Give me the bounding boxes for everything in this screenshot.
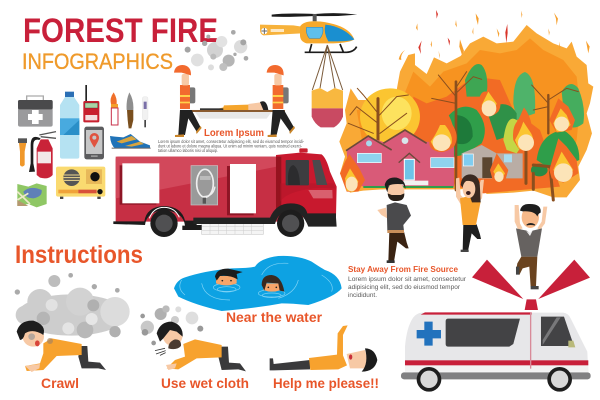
walkie talkie: [83, 85, 99, 122]
caption: Near the water: Near the water: [226, 310, 323, 325]
lying man asking for help: [270, 325, 377, 372]
medics carrying stretcher: [174, 65, 295, 137]
right storage panel: [227, 164, 256, 215]
wheels: [150, 210, 304, 237]
swimmer one: [215, 269, 243, 285]
Stay Away paragraph: Lorem ipsum dolor sit amet, consectetur: [348, 276, 467, 283]
left medic: [174, 65, 202, 137]
ambulance cab window: [541, 317, 574, 346]
water pool: [174, 256, 342, 311]
swimmer two: [262, 275, 284, 292]
Stay Away heading: Stay Away From Fire Source: [348, 264, 458, 274]
Stay Away paragraph: adipisicing elit, sed do eiusmod tempor: [348, 284, 461, 291]
crawling man: [17, 321, 106, 372]
right medic: [267, 65, 295, 137]
map: [17, 183, 47, 207]
Stay Away paragraph: [348, 276, 467, 299]
radio: [56, 167, 105, 199]
caption: Help me please: Help me please!!: [273, 376, 379, 391]
fire truck: [113, 148, 337, 237]
caption: Crawl: Crawl: [41, 376, 79, 391]
grey house: [462, 145, 523, 178]
fire truck text paragraph: dunt ut labore et dolore magna aliqua. Ut enim ad minim veniam, quis nostrud exerci-: [158, 144, 302, 149]
fire truck text heading: Lorem Ipsum: [204, 127, 264, 139]
title: FOREST FIRE: [23, 12, 218, 50]
Stay Away paragraph: incididunt.: [348, 292, 377, 299]
bare trees: [348, 72, 578, 200]
phone with location pin: [84, 127, 104, 159]
lighter: [111, 92, 118, 125]
rescue kit items: [17, 85, 151, 207]
thermometer: [142, 97, 148, 127]
hose panel: [191, 166, 218, 205]
bearded man running: [377, 178, 411, 263]
ambulance: [401, 260, 591, 392]
fenders and bumper: [113, 206, 202, 230]
fire truck text paragraph: tation ullamco laboris nisi ut aliquip.: [158, 148, 218, 153]
fire truck text paragraph: [158, 139, 304, 153]
fleeing people: [377, 174, 547, 289]
truck cab: [276, 148, 337, 217]
ambulance window: [446, 319, 520, 347]
instructions heading: Instructions: [15, 241, 143, 269]
smoke cloud: [15, 273, 130, 338]
smoke above medics: [185, 30, 248, 71]
fire truck text paragraph: Lorem ipsum dolor sit amet, consectetur adipiscing elit, sed do eiusmod tempor incidi-: [158, 139, 304, 144]
injured person: [200, 101, 268, 110]
first aid kit: [18, 96, 53, 127]
knife: [127, 92, 133, 128]
crawl smoke and figure: [15, 273, 130, 372]
left storage panel: [120, 163, 159, 205]
ambulance wheels: [417, 367, 572, 392]
water bottle: [60, 92, 79, 159]
siren light rays: [472, 260, 590, 310]
sneaker: [110, 134, 151, 149]
ladder grid: [202, 223, 263, 234]
pink house: [346, 130, 454, 188]
flame icons: [340, 82, 578, 192]
medical cross: [417, 322, 441, 346]
yellow glow: [360, 88, 420, 145]
water bucket: [312, 45, 343, 127]
wet cloth smoke and figure: [140, 305, 246, 371]
caption: Use wet cloth: Use wet cloth: [161, 376, 249, 391]
flashlight: [18, 138, 27, 167]
helicopter with water bucket: [260, 13, 357, 127]
fire extinguisher: [29, 132, 56, 178]
inner flames: [357, 38, 580, 190]
green trees: [432, 64, 584, 176]
outer flames: [339, 25, 593, 197]
subtitle: INFOGRAPHICS: [22, 49, 173, 74]
burning forest scene: [339, 10, 593, 200]
sparks: [399, 11, 590, 60]
man with raised arms: [515, 204, 547, 289]
woman running: [456, 174, 484, 252]
stretcher sheet: [195, 112, 272, 119]
